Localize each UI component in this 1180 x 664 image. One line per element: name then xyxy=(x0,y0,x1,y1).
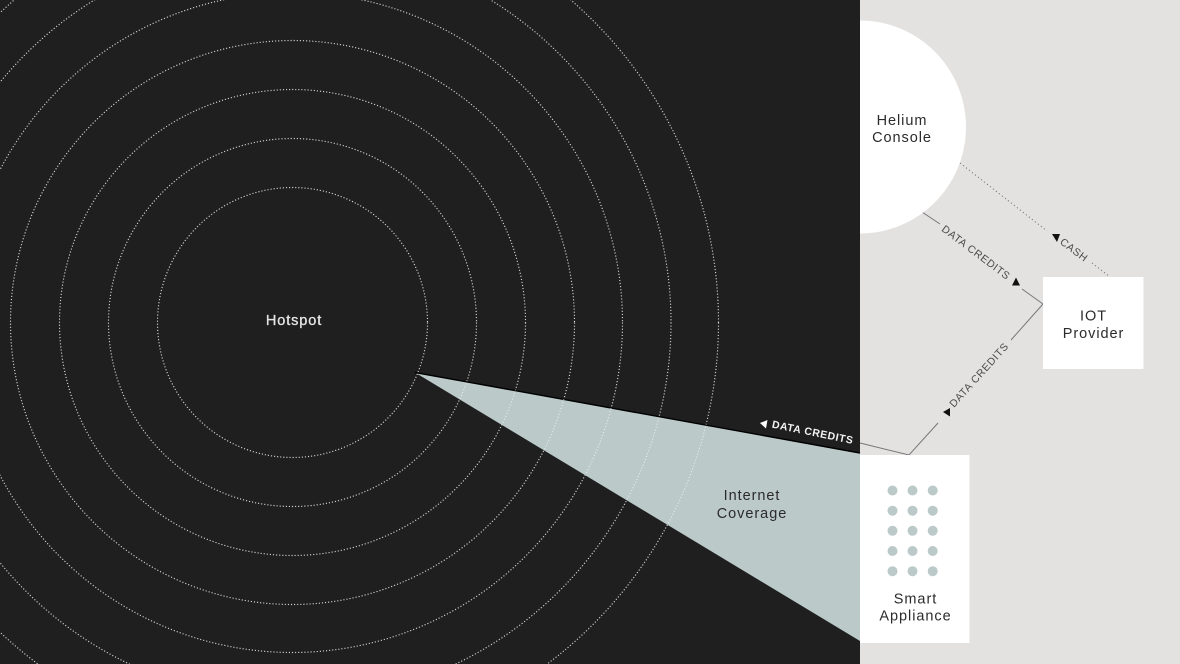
panel: dark hotspot area xyxy=(0,0,860,664)
arrow label: data credits from console: DATA CREDITS xyxy=(939,223,1012,283)
connector: appliance to IOT provider xyxy=(860,304,1043,455)
concentric hotspot signal rings xyxy=(0,0,718,664)
panel: Smart Appliance box xyxy=(860,455,970,643)
panel: IOT Provider box xyxy=(1043,277,1144,369)
label: IOT Provider: IOT xyxy=(1080,308,1107,324)
connector: cash dotted line xyxy=(960,163,1110,277)
connector: Helium Console to IOT provider xyxy=(922,212,1043,304)
faint rings over the wedge xyxy=(460,383,706,525)
arrow label: data credits along the wedge: DATA CREDITS xyxy=(771,419,854,447)
label: Smart Appliance: Smart xyxy=(894,592,937,608)
icon: appliance dot grid xyxy=(888,486,938,576)
label: Internet Coverage: Internet xyxy=(724,488,780,504)
arrow label: cash: CASH xyxy=(1057,236,1090,265)
label: IOT Provider: Provider xyxy=(1063,326,1124,342)
panel: Helium Console circle xyxy=(860,20,966,234)
label: Smart Appliance: Appliance xyxy=(879,608,952,624)
label: Hotspot: Hotspot xyxy=(266,313,322,329)
label: Internet Coverage: Coverage xyxy=(717,506,787,522)
label: Helium Console: Console xyxy=(872,130,932,146)
label: Helium Console: Helium xyxy=(877,113,927,129)
arrow label: data credits to appliance: DATA CREDITS xyxy=(947,341,1011,410)
coverage wedge xyxy=(415,372,860,641)
